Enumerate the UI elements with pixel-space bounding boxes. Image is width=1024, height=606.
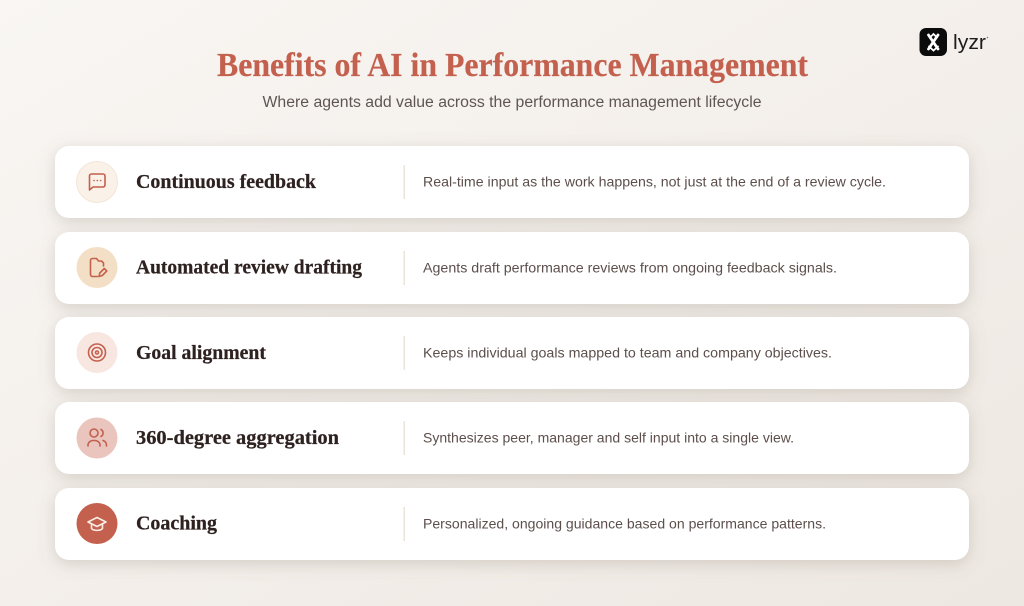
heading: 360-degree aggregation: 360-degree aggregation: [136, 427, 340, 449]
icon: graduation cap: [76, 503, 118, 544]
subtitle: Where agents add value across the performance management lifecycle: [262, 94, 762, 111]
title: Benefits of AI in Performance Management: [217, 47, 809, 84]
panel: coaching: [55, 488, 969, 560]
icon: chat bubble: [76, 162, 118, 202]
panel: goal alignment: [55, 317, 969, 389]
heading: automated review drafting: Automated review drafting: [136, 256, 363, 278]
description: 360-degree aggregation: Synthesizes peer, manager and self input into a single view.: [423, 430, 794, 446]
description: coaching: Personalized, ongoing guidance based on performance patterns.: [423, 516, 826, 532]
heading: goal alignment: Goal alignment: [136, 342, 266, 364]
description: automated review drafting: Agents draft performance reviews from ongoing feedback signals.: [423, 260, 837, 276]
panel: 360-degree aggregation: [55, 402, 969, 474]
heading: continuous feedback: Continuous feedback: [136, 171, 317, 193]
panel: automated review drafting: [55, 232, 969, 304]
logo: lyzr: [920, 28, 988, 56]
description: continuous feedback: Real-time input as the work happens, not just at the end of a review cycle.: [423, 174, 886, 190]
panel: continuous feedback: [55, 146, 969, 218]
icon: target: [76, 332, 118, 373]
heading: coaching: Coaching: [136, 512, 218, 534]
icon: people: [76, 418, 118, 458]
logo: lyzr: lyzr: [953, 32, 986, 54]
icon: document with pencil: [76, 247, 118, 288]
description: goal alignment: Keeps individual goals mapped to team and company objectives.: [423, 346, 832, 360]
